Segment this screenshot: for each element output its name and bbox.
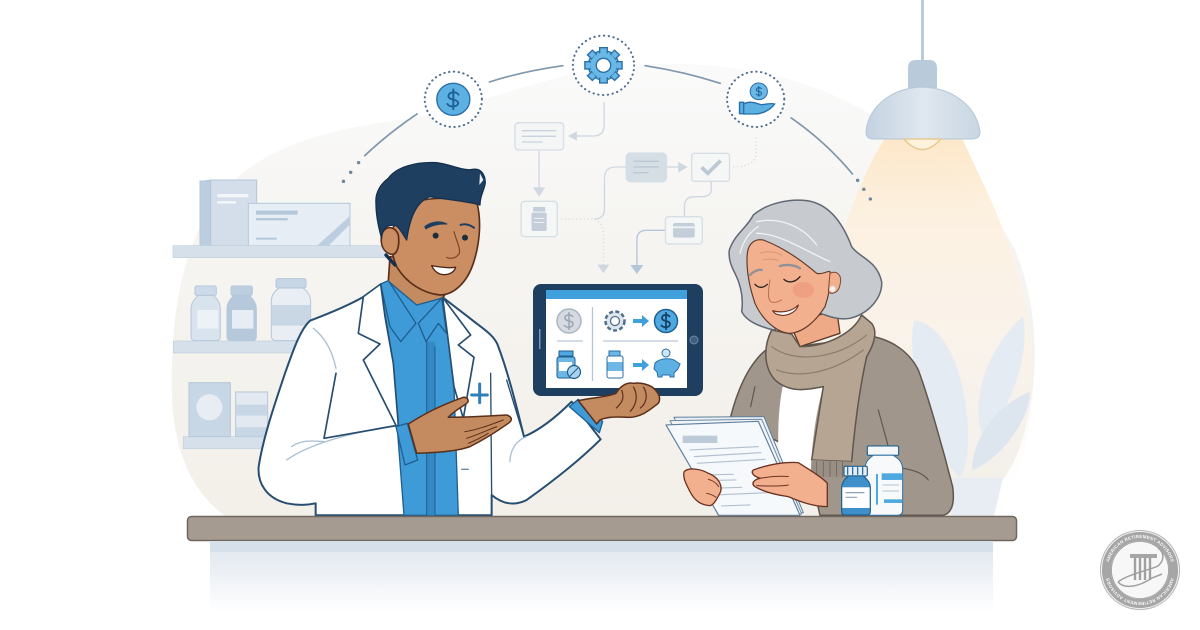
neck — [790, 310, 840, 347]
icon: gear in dotted ring — [573, 36, 634, 95]
flow: connectors and arrows — [539, 102, 756, 267]
right hand — [752, 462, 827, 507]
tablet — [533, 284, 703, 396]
hair — [376, 163, 485, 240]
arc dots — [342, 161, 872, 201]
scarf — [766, 315, 875, 462]
logo seal — [1100, 530, 1180, 610]
counter — [188, 516, 1016, 612]
connecting arcs — [365, 66, 852, 174]
hair back — [729, 200, 882, 330]
bottom shelf boxes — [189, 383, 268, 437]
background blob — [172, 64, 1035, 516]
screen icons — [557, 309, 581, 333]
left lapel — [358, 284, 398, 427]
left hand and cuff — [396, 423, 418, 465]
white bottle — [865, 446, 903, 515]
facial features — [425, 222, 474, 275]
seal text: AMERICAN RETIREMENT ADVISORS — [1106, 534, 1174, 562]
flow: boxes — [515, 123, 730, 244]
plant — [905, 316, 1030, 516]
coat folds — [287, 328, 527, 469]
senior woman — [666, 200, 953, 515]
pharmacist — [259, 163, 603, 515]
counter shadow — [210, 541, 993, 552]
icon: dollar in dotted ring — [425, 72, 482, 127]
top shelf items — [200, 180, 350, 246]
shelves with boxes and bottles — [173, 180, 386, 449]
right lapel — [443, 297, 474, 418]
seal column mark — [1118, 548, 1163, 586]
lamp light glow — [835, 138, 1033, 490]
middle shelf bottles — [191, 279, 311, 341]
face — [391, 198, 480, 295]
ribbed cuff — [812, 460, 852, 477]
seal text lower: AMERICAN RETIREMENT ADVISORS — [1106, 578, 1174, 606]
face — [747, 240, 830, 333]
collar — [381, 281, 447, 342]
blue bottle — [842, 466, 870, 515]
screen — [546, 290, 687, 388]
pharmacist hand holding tablet — [578, 383, 660, 424]
hair highlights — [740, 220, 830, 262]
right cuff — [569, 399, 603, 433]
woman's face details — [750, 252, 800, 315]
process flow and top icons — [342, 36, 872, 274]
neck — [388, 257, 463, 307]
lab coat — [259, 283, 601, 515]
white top — [778, 387, 823, 477]
icon: hand holding coin in dotted ring — [727, 72, 784, 127]
blue shirt — [381, 281, 458, 515]
shelf boards — [173, 246, 386, 449]
pocket pen — [472, 384, 487, 403]
cardigan — [731, 337, 953, 515]
papers — [674, 417, 803, 515]
left hand — [684, 469, 721, 506]
pendant lamp — [866, 0, 980, 150]
